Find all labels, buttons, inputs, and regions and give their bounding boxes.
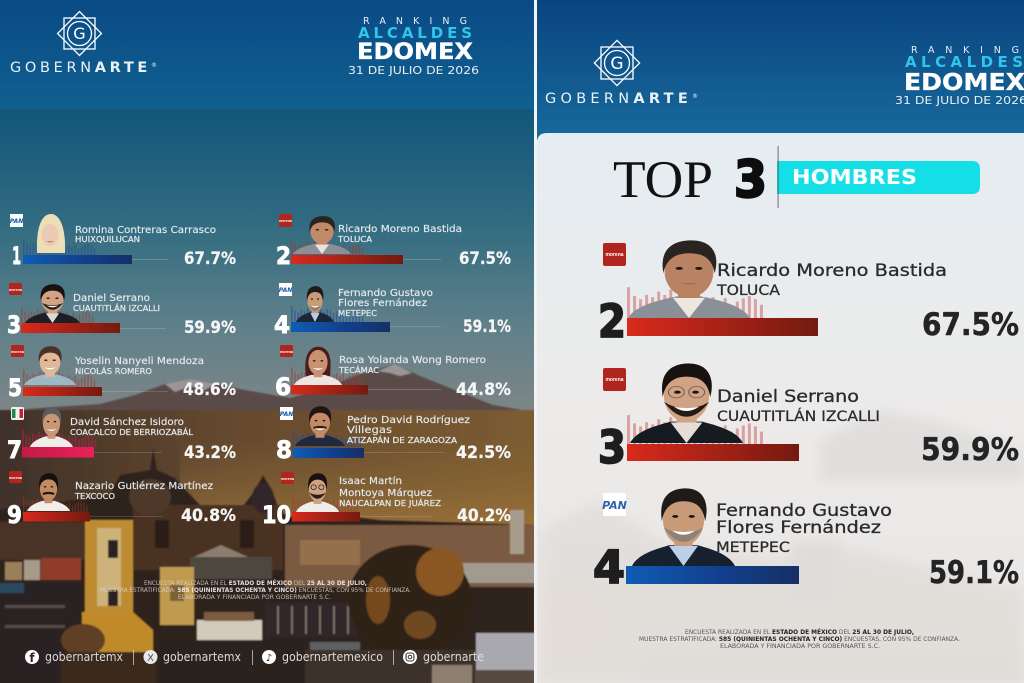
logo: Gobernarte left (10, 12, 157, 76)
icon: facebook (25, 650, 39, 665)
ranking entry 4: 4 (274, 311, 290, 339)
top entry: Fernando Gustavo Flores Fernandez: METEPEC (716, 540, 790, 556)
ranking entry 8: Pedro David Rodríguez (347, 415, 470, 426)
photo: David (30, 407, 73, 447)
icon: X: X (147, 653, 154, 664)
top entry: Ricardo Moreno Bastida: TOLUCA (716, 283, 780, 299)
ranking entry 7 (7, 407, 236, 464)
logo: morena: morena (605, 252, 624, 258)
logo: morena: morena (281, 477, 294, 481)
logo: Gobernarte right: G (610, 54, 624, 74)
ranking entry 3: 3 (7, 311, 21, 339)
photo: Daniel (630, 363, 743, 443)
title: Top 3 Hombres: 3 (734, 151, 767, 210)
ranking entry 5: 48.6% (183, 380, 236, 399)
ranking entry 5: Yoselin Nanyeli Mendoza (74, 356, 204, 367)
ranking entry 2: TOLUCA (337, 235, 373, 244)
ranking entry 2 (276, 214, 511, 270)
ranking entry 1 (10, 214, 236, 270)
ranking entry 6: 44.8% (456, 380, 511, 399)
ranking entry 6: Rosa Yolanda Wong Romero (339, 355, 486, 366)
ranking entry 4 (274, 283, 511, 339)
heading: ranking left: 31 DE JULIO DE 2026 (348, 64, 479, 77)
social media row: gobernartemexico (282, 650, 383, 664)
ranking entry 5: 5 (8, 374, 22, 402)
ranking entry 3 (7, 283, 236, 339)
heading: ranking left (348, 16, 479, 77)
photo: Romina (37, 214, 65, 253)
heading: ranking right: ALCALDES (905, 53, 1023, 71)
ranking entry 5: NICOLÁS ROMERO (75, 367, 152, 376)
ranking entry 4: METEPEC (338, 309, 377, 318)
logo: PAN (10, 214, 23, 227)
logo: Gobernarte left: GOBERN ARTE (10, 60, 147, 76)
photo: Ricardo (628, 240, 750, 318)
heading: ranking right (895, 45, 1024, 107)
photo: Ricardo (293, 216, 351, 254)
panel: left background photo (0, 0, 538, 683)
logo: morena (9, 283, 22, 295)
photo: Isaac (296, 473, 339, 512)
panel: right content card (537, 133, 1024, 683)
ranking entry 10: 40.2% (457, 506, 511, 525)
icon: tiktok: ♪ (266, 653, 272, 664)
logo: morena (280, 345, 293, 357)
photo: Fernando (296, 286, 334, 322)
logo: morena (603, 243, 626, 266)
ranking entry 2: 2 (276, 242, 291, 270)
top entry: Fernando Gustavo Flores Fernandez: Fernando Gustavo (716, 501, 892, 521)
heading: ranking left: EDOMEX (357, 40, 473, 65)
ranking entry 9: TEXCOCO (74, 492, 115, 501)
ranking entry 8: 8 (276, 436, 292, 464)
ranking entry 5 (8, 345, 236, 402)
logo: PAN (602, 493, 627, 516)
top entry: Ricardo Moreno Bastida: Ricardo Moreno Bastida (717, 261, 947, 281)
logo: morena: morena (11, 350, 24, 354)
icon: instagram (403, 650, 417, 664)
top entry: Fernando Gustavo Flores Fernandez: 4 (593, 541, 625, 594)
top entry: Ricardo Moreno Bastida (598, 240, 1019, 348)
heading: ranking right: EDOMEX (904, 70, 1024, 96)
logo: PAN (279, 283, 292, 296)
ranking entry 1: 1 (12, 242, 21, 270)
label: Hombres: HOMBRES (792, 165, 917, 189)
ranking entry 6 (275, 345, 511, 401)
photo: Fernando (632, 488, 735, 566)
photo: Pedro (295, 406, 345, 446)
social media row: gobernartemx (45, 650, 123, 664)
photo: Yoselin (24, 346, 76, 385)
ranking entry 1: Romina Contreras Carrasco (75, 225, 216, 236)
title: Top 3 Hombres: TOP (613, 151, 713, 209)
ranking entry 4: Fernando Gustavo (338, 288, 433, 299)
logo: morena (281, 472, 294, 484)
ranking entry 6: TECÁMAC (338, 366, 379, 375)
logo: PAN: PAN (10, 218, 23, 225)
ranking entry 8: ATIZAPÁN DE ZARAGOZA (347, 436, 458, 445)
logo: PAN (280, 407, 293, 420)
survey note left: ENCUESTA REALIZADA EN EL ESTADO DE MÉXICO DEL 25 AL 30 DE JULIO, (144, 579, 367, 587)
top entry: Ricardo Moreno Bastida: 2 (598, 295, 626, 348)
logo: morena: morena (9, 476, 22, 480)
ranking entry 7: 7 (7, 436, 22, 464)
logo: PAN: PAN (280, 411, 293, 418)
heading: ranking left: RANKING (363, 16, 467, 27)
ranking entry 1: 67.7% (184, 249, 236, 268)
icon: facebook: f (29, 651, 35, 665)
top entry: Daniel Serrano (598, 363, 1019, 474)
logo: morena (9, 471, 22, 483)
logo: morena (11, 345, 24, 357)
logo: Gobernarte right: ® (692, 93, 698, 100)
ranking entry 8 (276, 406, 511, 464)
social media row (25, 650, 484, 665)
ranking entry 4: 59.1% (463, 317, 511, 336)
survey note right: ENCUESTA REALIZADA EN EL ESTADO DE MÉXICO DEL 25 AL 30 DE JULIO, (685, 628, 914, 636)
ranking entry 10: Isaac Martín (339, 476, 402, 487)
logo: Gobernarte left: G (73, 24, 86, 43)
ranking entry 10: NAUCALPAN DE JUÁREZ (339, 499, 441, 508)
ranking entry 7: COACALCO DE BERRIOZABÁL (70, 428, 194, 437)
photo: Rosa (294, 347, 342, 385)
ranking entry 6: 6 (275, 373, 291, 401)
logo: morena (603, 368, 626, 391)
photo: Daniel (25, 284, 80, 323)
ranking entry 8: 42.5% (456, 443, 511, 462)
survey note left: MUESTRA ESTRATIFICADA: 585 (QUINIENTAS OCHENTA Y CINCO) ENCUESTAS, CON 95% DE CONFIANZA. (100, 587, 411, 594)
survey note right (639, 628, 960, 650)
logo: Gobernarte right: GOBERN ARTE (545, 91, 688, 107)
ranking entry 7: David Sánchez Isidoro (70, 417, 184, 428)
label: Hombres (777, 161, 980, 194)
panel: right header (537, 0, 1024, 140)
ranking entry 10 (262, 472, 511, 529)
heading: ranking right: 31 DE JULIO DE 2026 (895, 94, 1024, 107)
top entry: Fernando Gustavo Flores Fernandez: Flores Fernández (716, 518, 881, 538)
logo: Gobernarte right (545, 40, 698, 107)
logo: morena: morena (279, 219, 292, 223)
ranking entry 3: 59.9% (184, 318, 236, 337)
ranking entry 3: Daniel Serrano (73, 293, 150, 304)
ranking entry 2: Ricardo Moreno Bastida (338, 224, 462, 235)
top entry: Daniel Serrano: CUAUTITLÁN IZCALLI (717, 408, 880, 425)
top entry: Fernando Gustavo Flores Fernandez (593, 488, 1019, 594)
social media row: gobernarte (423, 650, 484, 664)
ranking entry 1: HUIXQUILUCAN (75, 235, 140, 244)
logo: PRI (11, 407, 24, 420)
survey note right: ELABORADA Y FINANCIADA POR GOBERNARTE S.C. (720, 643, 880, 650)
logo: morena: morena (280, 350, 293, 354)
logo: Gobernarte left: ® (151, 62, 157, 69)
ranking entry 8: Villegas (347, 425, 392, 436)
heading: ranking right: RANKING (911, 45, 1019, 56)
ranking entry 9: 9 (7, 501, 22, 529)
divider strip between panels (534, 0, 537, 683)
logo: morena: morena (9, 288, 22, 292)
icon: X (144, 650, 158, 664)
logo: morena: morena (605, 377, 624, 383)
logo: morena (279, 214, 292, 227)
ranking entry 10: 10 (262, 501, 291, 529)
ranking entry 2: 67.5% (459, 249, 511, 268)
icon: tiktok (262, 650, 276, 664)
ranking entry 3: CUAUTITLÁN IZCALLI (73, 304, 160, 313)
logo: PAN: PAN (279, 287, 292, 294)
social media row: gobernartemx (163, 650, 241, 664)
ranking entry 4: Flores Fernández (338, 298, 427, 309)
ranking entry 9: 40.8% (181, 506, 236, 525)
title: Top 3 Hombres (613, 146, 980, 210)
survey note left (100, 579, 411, 601)
ranking entry 7: 43.2% (184, 443, 236, 462)
top entry: Daniel Serrano: Daniel Serrano (717, 387, 859, 407)
survey note left: ELABORADA Y FINANCIADA POR GOBERNARTE S.C. (178, 594, 331, 601)
heading: ranking left: ALCALDES (358, 24, 472, 42)
ranking entry 10: Montoya Márquez (339, 488, 432, 499)
ranking entry 9 (7, 471, 236, 529)
logo: PAN: PAN (602, 499, 627, 512)
top entry: Daniel Serrano: 3 (598, 421, 626, 474)
ranking entry 9: Nazario Gutiérrez Martínez (75, 481, 213, 492)
survey note right: MUESTRA ESTRATIFICADA: 585 (QUINIENTAS OCHENTA Y CINCO) ENCUESTAS, CON 95% DE CONFIANZA. (639, 636, 960, 643)
photo: Nazario (27, 473, 70, 511)
